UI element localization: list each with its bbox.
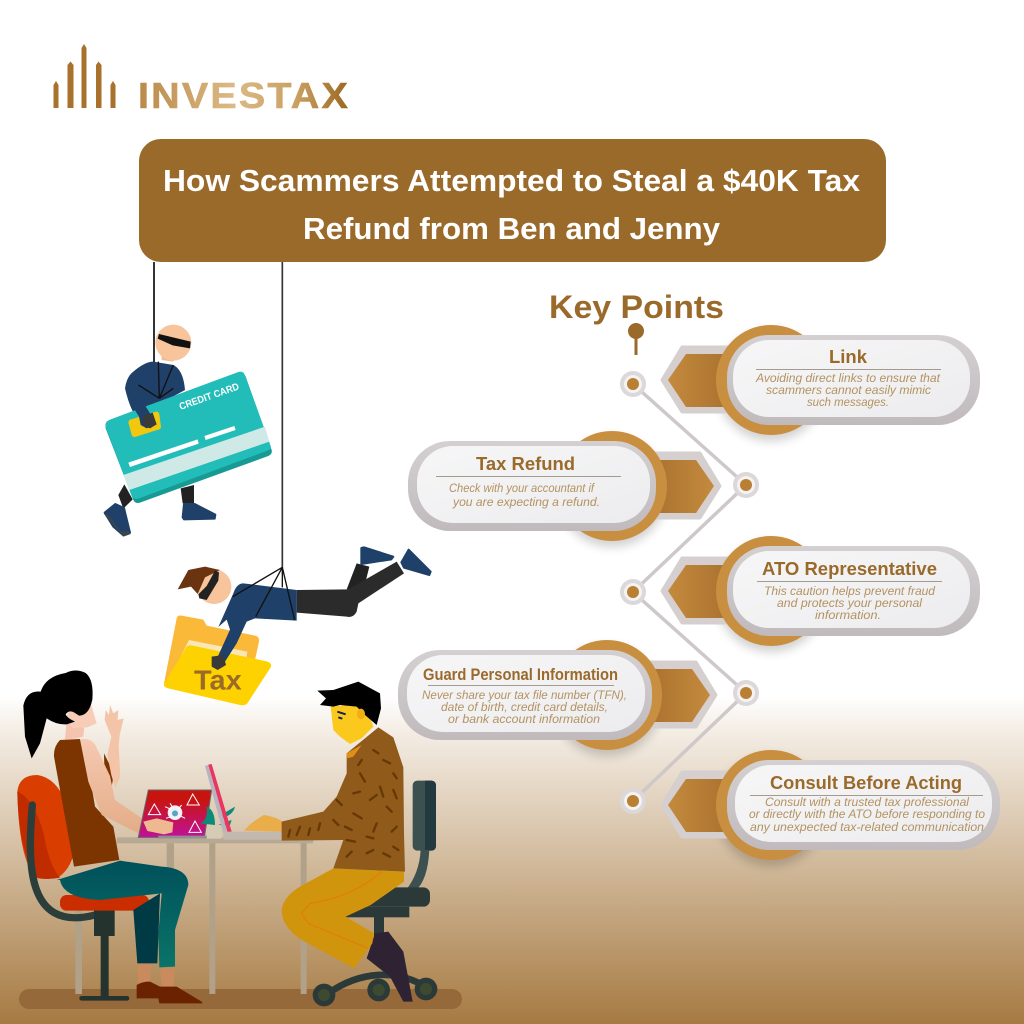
credit card: CREDIT CARD xyxy=(178,382,241,413)
face xyxy=(331,703,373,744)
hair xyxy=(317,682,381,725)
panel: Consult Before Acting: or directly with the ATO before responding to xyxy=(749,809,986,821)
jacket xyxy=(282,727,405,872)
panel: Link: scammers cannot easily mimic xyxy=(766,385,931,397)
panel: Consult Before Acting: Consult Before Acting xyxy=(770,773,962,793)
torso xyxy=(54,739,119,867)
logo: Investax xyxy=(54,44,350,116)
panel: Tax Refund: you are expecting a refund. xyxy=(452,497,600,509)
title banner: How Scammers Attempted to Steal a $40K Tax xyxy=(163,163,861,198)
plant and pot xyxy=(200,807,235,839)
heading: Key Points: Key Points xyxy=(549,289,724,325)
icon: logo bars xyxy=(54,44,116,108)
panel: Tax Refund xyxy=(408,431,720,547)
panel: ATO Representative: information. xyxy=(815,610,881,622)
title banner xyxy=(139,139,886,262)
panel: Consult Before Acting: any unexpected tax-related communication xyxy=(750,822,984,834)
panel: Tax Refund: Tax Refund xyxy=(476,454,575,474)
panel: ATO Representative: ATO Representative xyxy=(762,559,937,579)
panel: Link: Avoiding direct links to ensure that xyxy=(755,373,941,385)
illustration: desk xyxy=(75,837,313,994)
credit card xyxy=(105,372,272,503)
panel: Consult Before Acting: Consult with a trusted tax professional xyxy=(765,797,969,809)
illustration: man at laptop xyxy=(200,682,437,1006)
hair xyxy=(23,670,93,758)
panel: ATO Representative: and protects your personal xyxy=(777,598,922,610)
node 4 xyxy=(733,680,759,706)
panel: Link: Link xyxy=(829,347,868,367)
illustration: thief with credit card xyxy=(104,262,272,537)
node 1 xyxy=(620,371,646,397)
node 5 xyxy=(620,788,646,814)
laptop with warnings xyxy=(138,790,218,838)
laptop xyxy=(205,764,283,840)
panel: Guard Personal Information: date of birth, credit card details, xyxy=(441,702,608,714)
chair xyxy=(313,781,437,1006)
panel: Guard Personal Information: Guard Personal Information xyxy=(423,665,618,684)
tax folder xyxy=(164,616,271,705)
illustration: thief with tax folder xyxy=(164,262,431,705)
panel: ATO Representative: This caution helps prevent fraud xyxy=(764,586,936,598)
icon: pin under heading xyxy=(628,323,644,355)
chair xyxy=(17,775,149,1001)
panel: Consult Before Acting xyxy=(662,750,1000,866)
panel: Link: such messages. xyxy=(807,397,889,409)
tax folder: Tax xyxy=(194,664,242,695)
panel: Guard Personal Information xyxy=(398,640,716,756)
node 3 xyxy=(620,579,646,605)
connector timeline xyxy=(620,371,759,814)
illustration: floor xyxy=(19,989,462,1009)
panel: Guard Personal Information: Never share your tax file number (TFN), xyxy=(422,690,627,702)
panel: Link xyxy=(662,325,980,441)
trousers xyxy=(282,868,404,968)
panel: ATO Representative xyxy=(662,536,980,652)
title banner: Refund from Ben and Jenny xyxy=(303,211,721,246)
panel: Guard Personal Information: or bank account information xyxy=(448,714,600,726)
illustration: woman at laptop xyxy=(17,670,218,1003)
logo wordmark: INVESTAX xyxy=(138,75,350,116)
panel: Tax Refund: Check with your accountant if xyxy=(449,483,596,495)
node 2 xyxy=(733,472,759,498)
